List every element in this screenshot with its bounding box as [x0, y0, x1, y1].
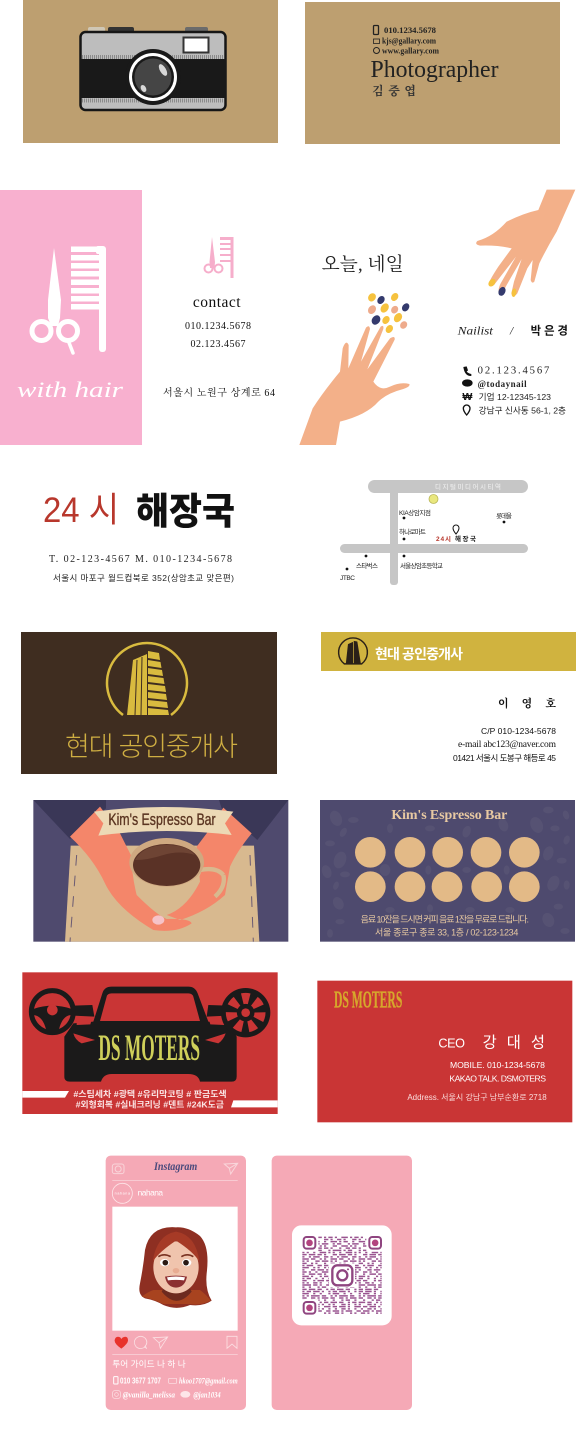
mat stitching [70, 855, 253, 942]
profile name: nahana [138, 1188, 163, 1198]
map labels: 서울상암초등학교 [400, 561, 443, 570]
address: Address. 서울시 강남구 남부순환로 2718 [407, 1092, 547, 1102]
panel: DS Moters card back [317, 981, 572, 1122]
header divider [112, 1180, 238, 1182]
dark sleeves [33, 800, 288, 840]
coffee bean pattern [320, 807, 571, 938]
black brand text: 해장국 [136, 491, 235, 532]
map labels: JTBC [340, 575, 355, 582]
icon: steering wheel [31, 991, 73, 1033]
QR tile [292, 1225, 392, 1325]
red brand text: 24 시 [43, 491, 119, 530]
panel: realty card back [321, 632, 576, 763]
map roads [340, 480, 528, 585]
stamp offer text: 음료 10잔을 드시면 커피 음료 1잔을 무료로 드립니다. [361, 914, 529, 924]
address and phone: 서울 종로구 종로 33, 1층 / 02-123-1234 [375, 928, 518, 938]
instagram id: @vanilla_melissa [123, 1390, 175, 1399]
panel: photographer card back [305, 2, 560, 144]
website: www.gallary.com [382, 46, 439, 56]
phone number: 010 3677 1707 [120, 1376, 161, 1386]
company name: 현대 공인중개사 [375, 646, 463, 662]
icon: chat [180, 1391, 190, 1398]
phone number: 010.1234.5678 [384, 26, 436, 35]
panel: realty card front [21, 632, 277, 774]
icon: camera [112, 1164, 124, 1174]
contact heading: contact [193, 294, 241, 311]
profile avatar [112, 1183, 132, 1203]
brand name: Kim's Espresso Bar [391, 808, 507, 823]
panel: QR card [272, 1156, 412, 1410]
fingernail [152, 915, 164, 925]
photo frame [112, 1207, 238, 1331]
panel: camera card front [23, 0, 278, 143]
job title: Nailist [456, 326, 494, 338]
icon: location pin [453, 525, 459, 534]
map labels: 스타벅스 [356, 561, 378, 570]
email: hkoo1707@gmail.com [179, 1376, 238, 1385]
QR corner markers [304, 1237, 381, 1314]
profile avatar: nahana [115, 1192, 131, 1196]
panel: espresso card front [33, 800, 288, 942]
business number: 기업 12-12345-123 [479, 392, 551, 402]
map labels: 해장국 [455, 534, 476, 543]
phone number: 02.123.4567 [478, 366, 550, 377]
phone numbers: T. 02-123-4567 M. 010-1234-5678 [49, 554, 232, 565]
job title: Photographer [370, 57, 498, 83]
icon: phone [463, 366, 471, 376]
mobile: C/P 010-1234-5678 [481, 726, 556, 736]
panel: DS Moters card front [22, 972, 278, 1114]
address: 서울시 마포구 월드컵북로 352(상암초교 맞은편) [53, 573, 234, 583]
brand name: with hair [17, 377, 124, 402]
CEO name: 강 대 성 [483, 1034, 545, 1051]
icon: tire wheel [221, 988, 270, 1037]
station label: 디지털미디어시티역 [435, 482, 501, 491]
mobile: MOBILE. 010-1234-5678 [450, 1060, 545, 1070]
icon: phone [114, 1377, 118, 1384]
action divider [112, 1353, 238, 1355]
QR code modules [302, 1237, 382, 1313]
icon: small scissors and comb [204, 237, 234, 278]
ribbon [94, 807, 233, 836]
panel: nail card front and back [299, 190, 575, 445]
paper mat [65, 846, 259, 942]
illustration: lower hand [299, 326, 410, 445]
address: 서울시 노원구 상계로 64 [163, 386, 275, 399]
header band [321, 632, 576, 671]
stamp circles [355, 837, 540, 902]
profile description: 투어 가이드 나 하 나 [112, 1359, 186, 1369]
hands [70, 807, 252, 931]
icon: mail [374, 39, 380, 44]
illustration: upper hand [476, 190, 575, 297]
map labels [340, 508, 512, 582]
icon: share [153, 1337, 168, 1348]
icon: location pin [463, 405, 470, 415]
service tags line 1: #스팀세차 #광택 #유리막코팅 # 판금도색 [73, 1089, 227, 1099]
coffee cup [129, 838, 224, 914]
chat id: @jan1034 [193, 1390, 221, 1399]
mobile: 010.1234.5678 [185, 321, 251, 332]
icon: instagram [113, 1391, 120, 1398]
email: e-mail abc123@naver.com [458, 740, 557, 750]
panel: haejangguk card front [43, 491, 235, 583]
icon: bookmark [227, 1336, 237, 1348]
name: 김 중 엽 [372, 83, 416, 98]
address: 강남구 신사동 56-1, 2층 [479, 405, 566, 415]
subway marker [429, 494, 438, 504]
panel: hair salon card back [163, 237, 275, 399]
illustration: car [64, 987, 237, 1082]
icon: chat [462, 379, 473, 387]
QR clear zones [301, 1235, 384, 1317]
icon: won: ₩ [462, 392, 473, 403]
icon: send [224, 1163, 238, 1174]
service tags line 2: #외형회복 #실내크리닝 #덴트 #24K도금 [76, 1099, 224, 1109]
map labels: KIA상암지점 [399, 508, 431, 517]
icon: heart [115, 1337, 128, 1349]
logo: building in circle [107, 643, 187, 715]
icon: phone [374, 26, 378, 34]
slash: / [509, 326, 515, 338]
icon: instagram logo [332, 1265, 352, 1285]
icon: comment [134, 1336, 147, 1349]
kakao id: KAKAO TALK. DSMOTERS [449, 1074, 546, 1084]
panel: map card [340, 480, 528, 585]
logo: small building [339, 638, 367, 664]
email: kjs@gallary.com [382, 36, 436, 46]
panel: hair salon card front [0, 190, 142, 445]
instagram id: @todaynail [478, 379, 527, 389]
name: 박은경 [531, 323, 568, 337]
illustration: avatar portrait [139, 1227, 212, 1308]
map labels: 하나로마트 [399, 527, 426, 536]
name: 이 영 호 [498, 696, 556, 710]
icon: mail [169, 1378, 177, 1383]
address: 01421 서울시 도봉구 해등로 45 [453, 753, 556, 763]
map dots [346, 517, 505, 570]
white bars [22, 1091, 278, 1107]
icon: globe [374, 48, 380, 54]
panel: espresso stamp card [320, 800, 575, 942]
CEO title: CEO [438, 1036, 465, 1050]
icon: scissors and comb [32, 246, 106, 353]
company name: 현대 공인중개사 [65, 732, 238, 762]
panel: DS Moters card back: DS MOTERS [334, 986, 402, 1013]
panel: DS Moters card front: DS MOTERS [98, 1028, 200, 1069]
panel: instagram style card [106, 1156, 246, 1410]
phone: 02.123.4567 [190, 339, 246, 350]
instagram logo text: Instagram [153, 1159, 197, 1173]
icon: camera [80, 27, 226, 110]
map labels: 24시 [436, 535, 451, 543]
brand name: Kim's Espresso Bar [108, 810, 216, 829]
nail polish dots [366, 292, 411, 334]
map labels: 롯데울 [496, 512, 512, 520]
heading: today nail: 오늘, 네일 [322, 254, 404, 275]
